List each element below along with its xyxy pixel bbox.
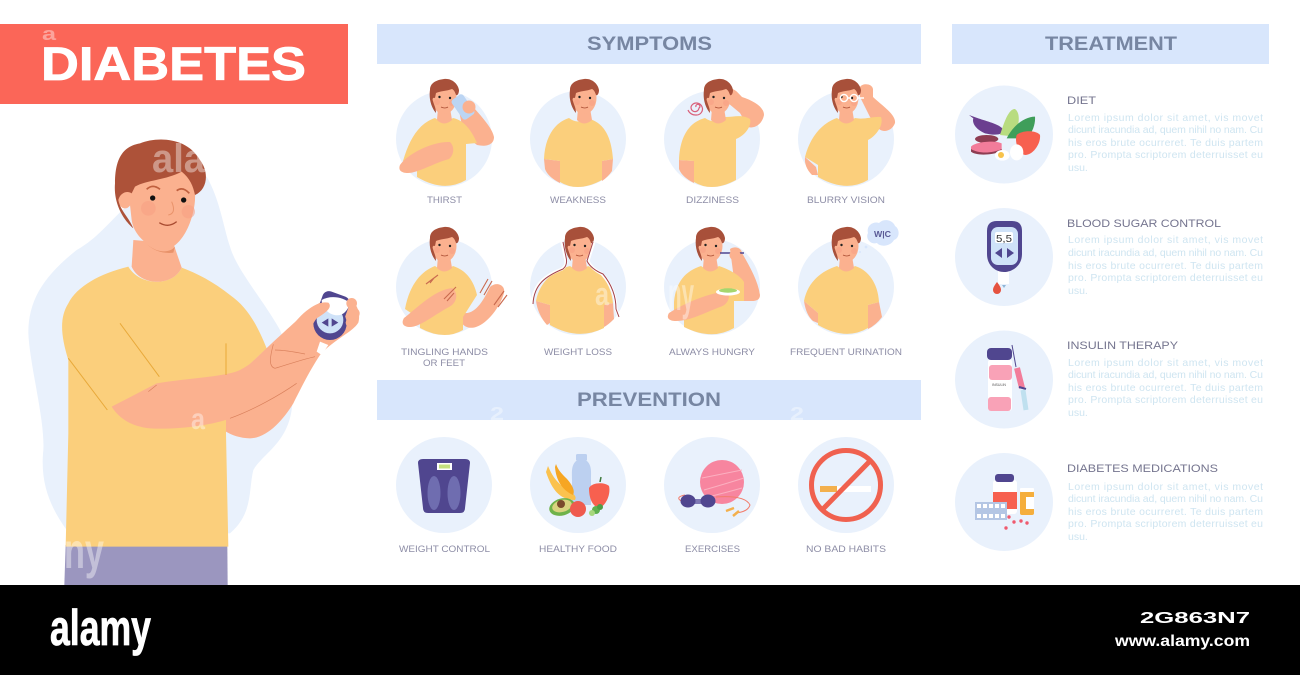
treatment text: diet: dicunt iracundia ad, quem nihil no nam. Cu: [1068, 124, 1263, 136]
label: healthy food: HEALTHY FOOD: [539, 544, 617, 555]
watermark marks: a: [595, 276, 609, 312]
footer bar with stock agency credit: 2G863N7: [1140, 610, 1250, 627]
treatment icon: blood sugar meter: [955, 208, 1053, 306]
watermark marks: a: [191, 403, 205, 436]
treatment text: insulin therapy: pro. Prompta scriptorem deterruisset eu: [1068, 394, 1263, 406]
treatment icon: blood sugar meter: 5,5: [996, 233, 1012, 245]
treatment text: diet: [1067, 95, 1263, 174]
treatment text: insulin therapy: usu.: [1068, 407, 1088, 419]
treatment text: insulin therapy: dicunt iracundia ad, quem nihil no nam. Cu: [1068, 369, 1263, 381]
treatment text: blood sugar control: [1067, 218, 1263, 297]
prevention: healthy food icon: [530, 437, 626, 533]
treatment text: diabetes medications: dicunt iracundia ad, quem nihil no nam. Cu: [1068, 493, 1263, 505]
watermark marks: 2: [790, 404, 804, 424]
prevention: weight control scale icon: [396, 437, 492, 533]
title banner: DIABETES: [41, 37, 306, 90]
treatment text: blood sugar control: usu.: [1068, 285, 1088, 297]
treatment icon: diet: [955, 86, 1053, 184]
icon: WC thought cloud: [867, 220, 899, 246]
symptom: always hungry: [664, 227, 760, 335]
treatment text: blood sugar control: Lorem ipsum dolor sit amet, vis movet: [1068, 234, 1263, 246]
treatment text: blood sugar control: BLOOD SUGAR CONTROL: [1067, 218, 1221, 230]
footer bar with stock agency credit: www.alamy.com: [1114, 633, 1250, 650]
label: thirst: THIRST: [427, 195, 462, 206]
label: exercises: EXERCISES: [685, 544, 740, 555]
label: tingling hands or feet: [401, 347, 488, 369]
treatment text: diabetes medications: pro. Prompta scriptorem deterruisset eu: [1068, 518, 1263, 530]
treatment text: diet: Lorem ipsum dolor sit amet, vis movet: [1068, 112, 1263, 124]
label: weakness: WEAKNESS: [550, 195, 606, 206]
label: weight loss: WEIGHT LOSS: [544, 347, 612, 358]
title banner: [0, 24, 348, 104]
footer bar with stock agency credit: [0, 585, 1300, 675]
treatment text: insulin therapy: INSULIN THERAPY: [1067, 340, 1179, 352]
treatment text: diet: his eros brute ocurreret. Te duis partem: [1068, 137, 1263, 149]
label: frequent urination: FREQUENT URINATION: [790, 347, 902, 358]
symptom: dizziness: [664, 79, 764, 187]
treatment text: diabetes medications: Lorem ipsum dolor sit amet, vis movet: [1068, 481, 1263, 493]
treatment text: diabetes medications: [1067, 463, 1263, 543]
symptom: frequent urination: [798, 227, 894, 335]
label: tingling hands or feet: TINGLING HANDS: [401, 347, 488, 358]
label: blurry vision: BLURRY VISION: [807, 195, 885, 206]
treatment icon: insulin: INSULIN: [992, 383, 1006, 387]
heading: prevention: PREVENTION: [577, 390, 721, 411]
label: always hungry: ALWAYS HUNGRY: [669, 347, 756, 358]
treatment text: insulin therapy: [1067, 340, 1263, 419]
heading: symptoms: SYMPTOMS: [587, 34, 712, 55]
watermark marks: a: [42, 24, 57, 44]
label: dizziness: DIZZINESS: [686, 195, 739, 206]
footer bar with stock agency credit: alamy: [50, 600, 151, 656]
treatment text: diet: pro. Prompta scriptorem deterruisset eu: [1068, 149, 1263, 161]
treatment text: diet: usu.: [1068, 162, 1088, 174]
heading: treatment: TREATMENT: [1045, 34, 1177, 55]
treatment text: diabetes medications: his eros brute ocurreret. Te duis partem: [1068, 506, 1263, 518]
main character: man checking blood sugar: [28, 139, 360, 585]
heading: prevention: [377, 380, 921, 420]
watermark marks: 2: [490, 404, 504, 424]
symptom: thirst: [396, 79, 494, 187]
symptom: tingling hands or feet: [396, 227, 507, 335]
prevention: no bad habits icon: [798, 437, 894, 533]
heading: treatment: [952, 24, 1269, 64]
treatment icon: diabetes medications: [955, 453, 1053, 551]
label: no bad habits: NO BAD HABITS: [806, 544, 886, 555]
label: tingling hands or feet: OR FEET: [423, 358, 465, 369]
treatment text: diabetes medications: DIABETES MEDICATIONS: [1067, 463, 1218, 475]
prevention: exercises icon: [664, 437, 760, 533]
watermark marks: ala: [152, 137, 206, 181]
label: weight control: WEIGHT CONTROL: [399, 544, 490, 555]
treatment text: diet: DIET: [1067, 95, 1096, 107]
treatment text: blood sugar control: his eros brute ocurreret. Te duis partem: [1068, 260, 1263, 272]
symptom: weight loss: [530, 227, 626, 335]
treatment text: blood sugar control: dicunt iracundia ad, quem nihil no nam. Cu: [1068, 247, 1263, 259]
watermark marks: [42, 24, 804, 579]
treatment text: diabetes medications: usu.: [1068, 531, 1088, 543]
icon: WC thought cloud: W|C: [874, 230, 891, 239]
symptom: blurry vision: [798, 79, 895, 187]
treatment icon: insulin: [955, 330, 1053, 428]
treatment text: insulin therapy: his eros brute ocurreret. Te duis partem: [1068, 382, 1263, 394]
treatment text: insulin therapy: Lorem ipsum dolor sit amet, vis movet: [1068, 357, 1263, 369]
symptom: weakness: [530, 79, 626, 187]
watermark marks: ny: [64, 523, 104, 579]
heading: symptoms: [377, 24, 921, 64]
watermark marks: ny: [668, 268, 694, 320]
treatment text: blood sugar control: pro. Prompta scriptorem deterruisset eu: [1068, 272, 1263, 284]
